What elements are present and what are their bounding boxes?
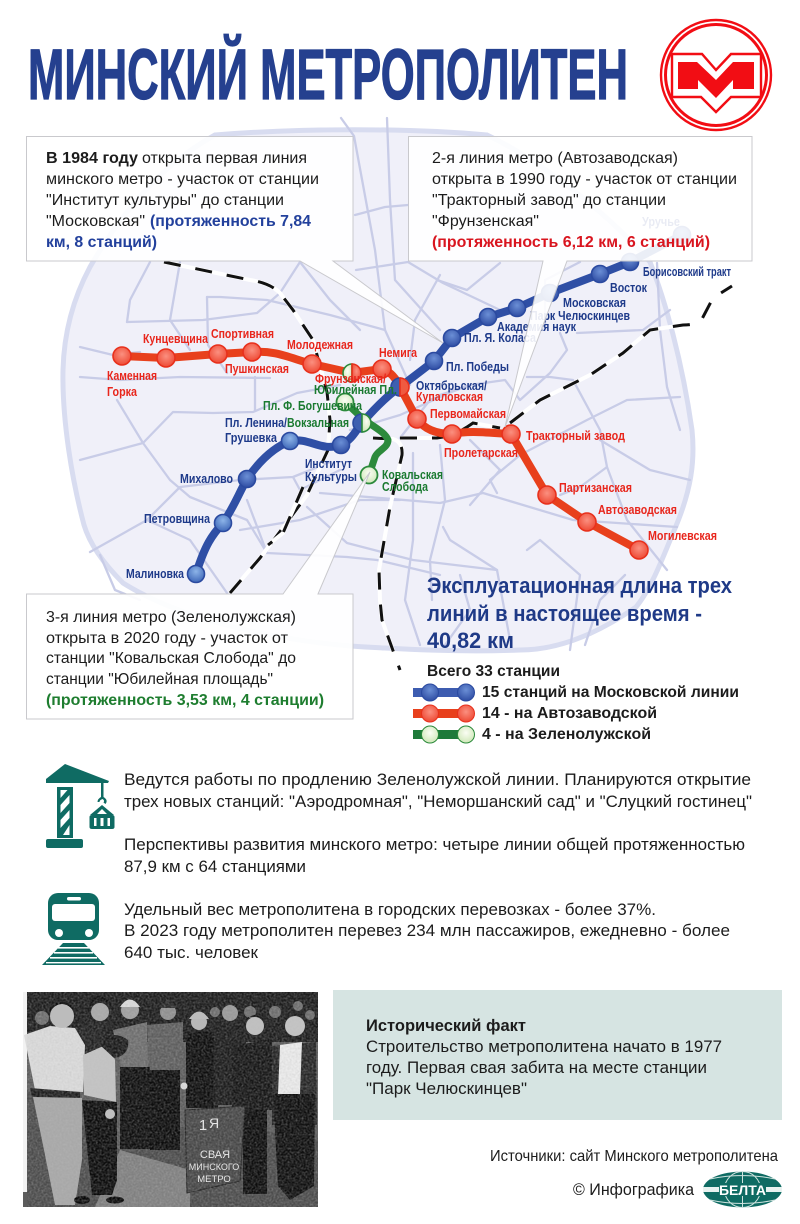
text: extension plans: Ведутся работы по продлению Зеленолужской линии. Планируются открытие [124, 770, 751, 789]
workers in helmets [113, 1000, 183, 1150]
station labels: green [263, 382, 443, 494]
station labels: blue: Академия наук [497, 319, 576, 334]
metro line: Avtozavodskaya (red) [122, 352, 639, 550]
historical fact text: году. Первая свая забита на месте станции [366, 1058, 707, 1077]
station labels: red: Купаловская [416, 389, 483, 404]
legend: blue line: 15 станций на Московской линии [482, 684, 739, 701]
station labels: blue: Парк Челюскинцев [530, 308, 630, 323]
station labels: red: Могилевская [648, 528, 717, 543]
station labels: red: Горка [107, 384, 138, 399]
worker in suit behind [75, 996, 111, 1055]
callout text: second line: (протяженность 6,12 км, 6 станций) [432, 234, 710, 251]
text: extension plans [124, 770, 752, 876]
historical fact heading: Исторический факт [366, 1016, 526, 1035]
callout text: second line [432, 150, 737, 251]
text: extension plans: 87,9 км с 64 станциями [124, 857, 306, 876]
callout: second line [408, 136, 752, 427]
crowd behind [35, 1001, 315, 1025]
station labels: green: Слобода [382, 479, 429, 494]
station labels: blue: Культуры [305, 469, 357, 484]
panel: historical fact [333, 990, 782, 1120]
city map base [63, 130, 693, 651]
callout text: first line: км, 8 станций) [46, 234, 157, 251]
callout text: third line: (протяженность 3,53 км, 4 станции) [46, 692, 324, 709]
station labels: blue: Пл. Победы [446, 359, 509, 374]
metro line: Zelenoluzhskaya (green) [345, 402, 388, 475]
woman in dark dress [180, 1012, 218, 1108]
station labels: red: Немига [379, 345, 418, 360]
station labels: red [107, 326, 717, 543]
heading: total length: Эксплуатационная длина трех [427, 573, 733, 598]
first pile marker: МЕТРО [197, 1174, 231, 1185]
callout text: first line: В 1984 году [46, 150, 138, 167]
stations: blue line [188, 226, 690, 582]
station labels: blue: Институт [305, 456, 352, 471]
text: ridership: 640 тыс. человек [124, 943, 259, 962]
interchange stations [343, 364, 409, 432]
text: ridership: Удельный вес метрополитена в городских перевозках - более 37%. [124, 900, 656, 919]
man in striped shirt [82, 1035, 128, 1204]
callout text: third line: станции "Ковальская Слобода" до [46, 650, 296, 667]
station labels: red: Первомайская [430, 406, 506, 421]
callout text: first line: "Институт культуры" до станции [46, 192, 284, 209]
historical fact text: "Парк Челюскинцев" [366, 1079, 527, 1098]
station labels: blue: Пл. Я. Коласа [464, 330, 537, 345]
text: ridership [124, 900, 730, 962]
text: extension plans: трех новых станций: "Аэродромная", "Неморшанский сад" и "Слуцкий гостинец" [124, 792, 752, 811]
station labels: red: Кунцевщина [143, 331, 209, 346]
callout text: third line: станции "Юбилейная площадь" [46, 671, 273, 688]
first pile marker: Я [209, 1115, 219, 1131]
station labels: green: Пл. Ф. Богушевича [263, 398, 363, 413]
station labels: red: Молодежная [287, 337, 353, 352]
callout text: first line: открыта первая линия [142, 150, 307, 167]
man in patterned shirt [24, 1002, 90, 1205]
station labels: red: Партизанская [559, 480, 632, 495]
icon: BelTA logo: БЕЛТА [719, 1182, 766, 1198]
station labels: blue: Борисовский тракт [643, 264, 731, 279]
callout text: first line: минского метро - участок от станции [46, 171, 319, 188]
callout: first line [26, 136, 443, 343]
stations: green line [336, 394, 378, 484]
first pile marker: МИНСКОГО [189, 1162, 239, 1172]
legend: red line: 14 - на Автозаводской [482, 705, 657, 722]
station labels: green: Юбилейная Пл. [314, 382, 397, 397]
icon: metro logo [661, 20, 771, 130]
station labels: red: Каменная [107, 368, 157, 383]
credit: © Инфографика [573, 1180, 695, 1199]
source: Источники: сайт Минского метрополитена [490, 1148, 778, 1165]
callout: third line [26, 472, 370, 719]
heading: total length: линий в настоящее время - [427, 601, 702, 626]
heading: total length: 40,82 км [427, 628, 514, 653]
historical fact text: Строительство метрополитена начато в 1977 [366, 1037, 722, 1056]
railway lines [164, 262, 732, 670]
station labels: red: Пушкинская [225, 361, 289, 376]
station labels: blue: Восток [610, 280, 647, 295]
callout text: second line: "Тракторный завод" до станции [432, 192, 666, 209]
callout text: third line: 3-я линия метро (Зеленолужская) [46, 609, 296, 626]
first pile marker: 1 [199, 1117, 207, 1134]
station labels: red: Спортивная [211, 326, 274, 341]
callout text: first line: (протяженность 7,84 [150, 213, 311, 230]
men in suits [213, 1005, 274, 1194]
station labels: blue: Московская [563, 295, 626, 310]
legend: green line: 4 - на Зеленолужской [482, 726, 651, 743]
heading: total length [427, 573, 733, 653]
metro line: Moscow (blue) [196, 235, 682, 574]
station labels: blue: Петровщина [144, 511, 211, 526]
callout text: second line: "Фрунзенская" [432, 213, 539, 230]
historical fact text [366, 1037, 722, 1098]
legend: Всего 33 станции [427, 663, 560, 680]
callout text: first line: "Московская" [46, 213, 145, 230]
station labels: blue [126, 214, 731, 581]
first pile marker: СВАЯ [200, 1149, 230, 1161]
callout text: first line [46, 150, 319, 251]
station labels: blue: Малиновка [126, 566, 185, 581]
station labels: red: Автозаводская [598, 502, 677, 517]
callout text: second line: 2-я линия метро (Автозаводская) [432, 150, 678, 167]
station labels: blue: Уручье [642, 214, 680, 229]
street network [80, 118, 690, 650]
station labels: blue: Пл. Ленина/ [225, 415, 287, 430]
text: ridership: В 2023 году метрополитен перевез 234 млн пассажиров, ежедневно - более [124, 921, 730, 940]
callout text: second line: открыта в 1990 году - участок от станции [432, 171, 737, 188]
stations: red line [113, 343, 648, 559]
station labels: blue: Грушевка [225, 430, 278, 445]
first pile marker [185, 1106, 245, 1193]
station labels: red: Пролетарская [444, 445, 518, 460]
historical photo [23, 992, 318, 1207]
callout text: third line: открыта в 2020 году - участок от [46, 630, 289, 647]
icon: BelTA logo [703, 1172, 782, 1208]
text: extension plans: Перспективы развития минского метро: четыре линии общей протяженностью [124, 835, 745, 854]
man on right [272, 1014, 317, 1200]
station labels: red: Фрунзенская/ [315, 371, 386, 386]
station labels: green: Вокзальная [287, 415, 349, 430]
callout text: third line [46, 609, 324, 709]
station labels: blue: Михалово [180, 471, 233, 486]
station labels: green: Ковальская [382, 467, 443, 482]
legend [413, 663, 739, 743]
station labels: red: Тракторный завод [526, 428, 626, 443]
station labels: blue: Октябрьская/ [416, 378, 487, 393]
icon: crane [46, 764, 114, 848]
icon: train [42, 893, 105, 965]
